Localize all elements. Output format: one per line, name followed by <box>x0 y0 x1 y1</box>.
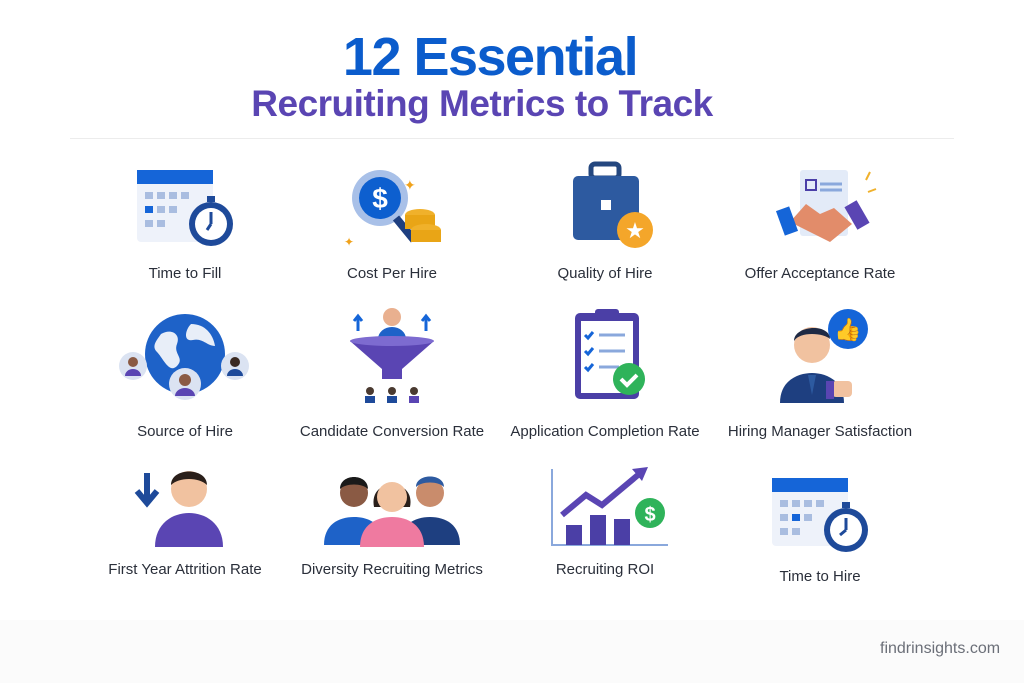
item: candidate conversion rate <box>300 308 484 440</box>
icon: manager thumbs up: 👍 <box>834 317 862 342</box>
item: cost per hire <box>344 170 441 282</box>
item: source of hire <box>119 314 249 440</box>
item: time to hire: Time to Hire <box>779 568 861 585</box>
item: offer acceptance rate: Offer Acceptance Rate <box>745 265 895 282</box>
item: application completion rate: Application Completion Rate <box>510 423 700 440</box>
item: time to hire <box>772 478 868 585</box>
icon: briefcase star: ★ <box>625 218 645 243</box>
icon: globe people <box>119 314 249 400</box>
item: quality of hire: Quality of Hire <box>557 265 653 282</box>
icon: manager thumbs up <box>780 309 868 403</box>
item: time to fill <box>137 170 233 282</box>
subtitle: Recruiting Metrics to Track <box>251 83 713 124</box>
item: quality of hire <box>557 162 653 282</box>
icon: magnifier coins <box>344 170 441 249</box>
item: hiring manager satisfaction: Hiring Manager Satisfaction <box>728 423 912 440</box>
icon: clipboard check <box>575 309 645 399</box>
item: diversity recruiting metrics <box>301 476 483 578</box>
item: time to fill: Time to Fill <box>149 265 221 282</box>
item: recruiting roi: Recruiting ROI <box>556 561 654 578</box>
icon: growth chart <box>551 467 668 546</box>
item: first year attrition rate <box>108 471 262 578</box>
icon: magnifier coins: $ <box>372 183 388 214</box>
icon: three people <box>324 476 460 547</box>
icon: handshake document <box>776 170 876 242</box>
icon: briefcase star <box>573 162 653 248</box>
icon: calendar stopwatch <box>137 170 233 246</box>
footer: source: findrinsights.com <box>880 640 1000 657</box>
icon: person down arrow <box>134 471 223 547</box>
icon: funnel <box>350 308 434 403</box>
item: recruiting roi <box>551 467 668 578</box>
item: candidate conversion rate: Candidate Conversion Rate <box>300 423 484 440</box>
item: first year attrition rate: First Year Attrition Rate <box>108 561 262 578</box>
item: diversity recruiting metrics: Diversity Recruiting Metrics <box>301 561 483 578</box>
item: cost per hire: Cost Per Hire <box>347 265 437 282</box>
item: source of hire: Source of Hire <box>137 423 233 440</box>
item: hiring manager satisfaction <box>728 309 912 440</box>
title: 12 Essential <box>343 27 637 87</box>
icon: growth chart: $ <box>644 504 656 526</box>
item: offer acceptance rate <box>745 170 895 282</box>
icon: calendar stopwatch <box>772 478 868 552</box>
icon: magnifier coins: ✦ <box>344 235 354 249</box>
icon: magnifier coins: ✦ <box>404 177 416 193</box>
item: application completion rate <box>510 309 700 440</box>
